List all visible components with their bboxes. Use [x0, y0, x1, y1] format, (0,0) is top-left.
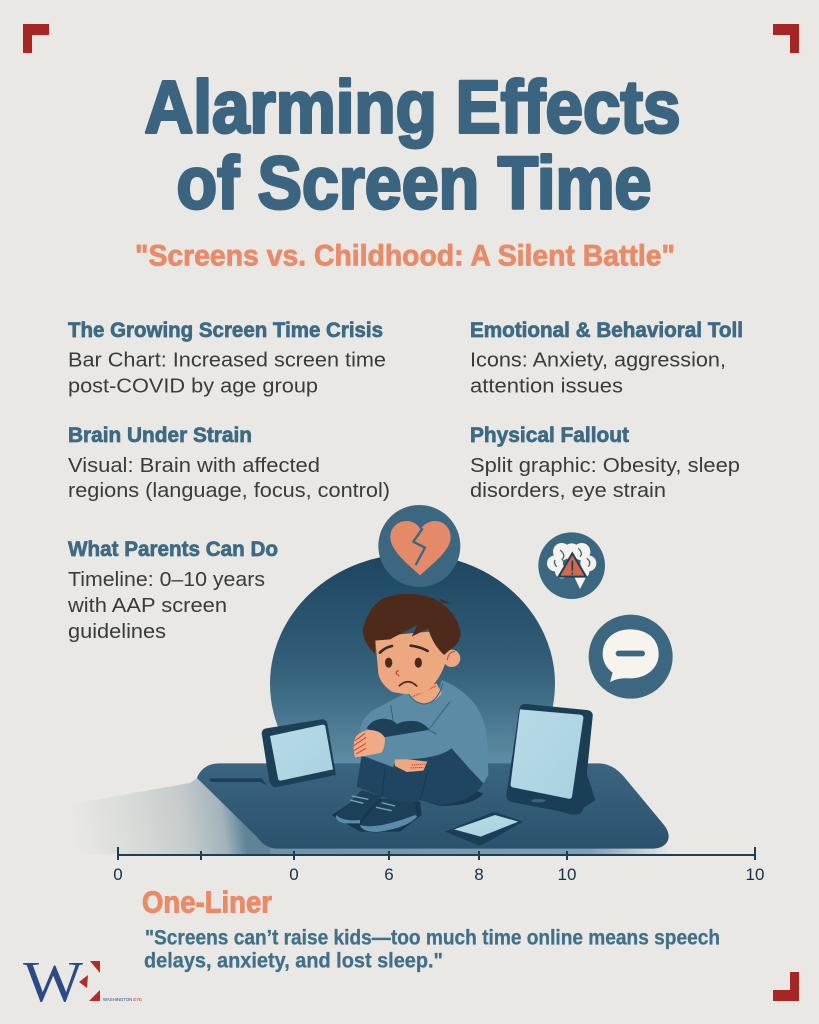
title: Alarming Effects	[144, 66, 680, 148]
text block: brain under strain: Visual: Brain with affected	[68, 455, 320, 477]
text block: what parents can do: with AAP screen	[67, 595, 227, 617]
title	[144, 66, 680, 224]
text block: brain under strain	[68, 424, 390, 502]
corner bracket bottom-right	[773, 972, 799, 1001]
hair	[363, 594, 461, 655]
boy	[332, 594, 488, 833]
text block: what parents can do: guidelines	[68, 621, 166, 643]
corner bracket top-right	[773, 24, 799, 53]
illustration: sad boy among screens	[60, 505, 673, 854]
text block: growing screen time crisis	[68, 319, 386, 398]
text block: emotional and behavioral toll: Icons: Anxiety, aggression,	[470, 350, 726, 372]
one-liner quote	[144, 926, 720, 972]
logo: Washington Eye: WASHINGTON EYE	[103, 997, 142, 1002]
icon: broken heart	[378, 505, 460, 587]
text block: physical fallout: Split graphic: Obesity, sleep	[470, 455, 740, 477]
pants and shadow	[420, 790, 483, 806]
ear	[443, 650, 460, 667]
sweater body	[360, 680, 488, 783]
one-liner quote: delays, anxiety, and lost sleep."	[144, 950, 443, 972]
corner bracket top-left	[23, 24, 49, 53]
text block: growing screen time crisis: Bar Chart: Increased screen time	[68, 350, 386, 372]
text block: physical fallout: disorders, eye strain	[470, 480, 666, 502]
one-liner quote: "Screens can’t raise kids—too much time online means speech	[145, 926, 720, 950]
text block: growing screen time crisis: The Growing Screen Time Crisis	[68, 319, 383, 342]
timeline: 0	[113, 865, 123, 884]
tablet left	[209, 719, 336, 787]
eyes and mouth	[380, 646, 428, 653]
tablet right	[506, 704, 595, 815]
upper hand	[354, 730, 385, 757]
text block: physical fallout	[470, 424, 740, 502]
shoes	[336, 790, 382, 823]
floor shadow tail	[60, 776, 290, 854]
text block: what parents can do	[67, 538, 278, 643]
icon: brain with warning	[538, 532, 605, 599]
timeline: 0	[289, 865, 299, 884]
logo: Washington Eye: W	[23, 949, 83, 1014]
text block: brain under strain: Brain Under Strain	[68, 424, 252, 447]
text block: emotional and behavioral toll	[470, 319, 743, 398]
lower hand	[393, 757, 427, 772]
sleeves	[363, 751, 395, 767]
phone	[445, 812, 523, 845]
face	[375, 630, 447, 694]
text block: emotional and behavioral toll: attention issues	[470, 376, 623, 398]
floor mat	[197, 763, 669, 849]
text block: what parents can do: What Parents Can Do	[68, 538, 278, 561]
knees	[367, 719, 430, 737]
title: of Screen Time	[176, 142, 652, 224]
icon: speech bubble	[589, 615, 673, 699]
neck	[408, 683, 442, 703]
logo: Washington Eye	[23, 949, 142, 1014]
subtitle: "Screens vs. Childhood: A Silent Battle"	[135, 240, 675, 272]
text block: what parents can do: Timeline: 0–10 years	[68, 569, 265, 591]
text block: emotional and behavioral toll: Emotional & Behavioral Toll	[470, 319, 743, 342]
timeline: 8	[474, 865, 484, 884]
timeline: 6	[384, 865, 394, 884]
one-liner heading: One-Liner	[142, 884, 272, 920]
text block: growing screen time crisis: post-COVID by age group	[68, 376, 318, 398]
timeline	[113, 847, 764, 884]
text block: physical fallout: Physical Fallout	[470, 424, 629, 447]
dome background	[270, 554, 555, 766]
text block: brain under strain: regions (language, focus, control)	[68, 480, 390, 502]
timeline: 10	[746, 865, 764, 884]
timeline: 10	[558, 865, 576, 884]
